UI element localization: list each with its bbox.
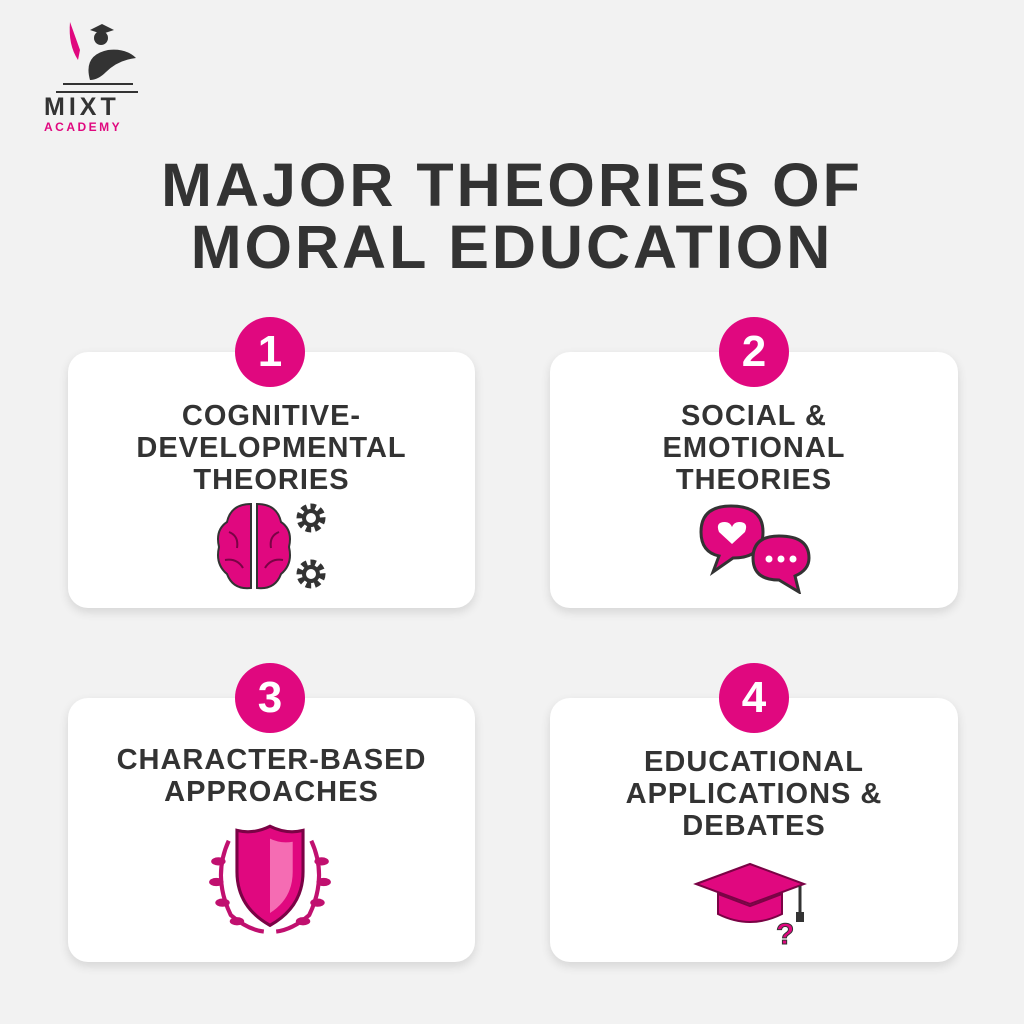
heading: card 1: THEORIES [193, 464, 350, 496]
heading: card 2 [662, 400, 846, 496]
heading: card 1: COGNITIVE- [182, 400, 361, 432]
heading: card 3: APPROACHES [164, 776, 379, 808]
badge 4 [719, 663, 789, 733]
heading: card 4: EDUCATIONAL [644, 746, 864, 778]
logo: ACADEMY [44, 120, 122, 134]
icon: graduation cap with question mark [693, 862, 807, 946]
title: MORAL EDUCATION [191, 213, 833, 281]
heading: card 2: EMOTIONAL [662, 432, 846, 464]
heading: card 3 [117, 744, 426, 808]
badge 3 [235, 663, 305, 733]
icon: chat bubbles [700, 504, 810, 594]
logo [44, 22, 138, 134]
panel: card 4 [550, 698, 958, 962]
icon: brain with gears [217, 503, 326, 590]
badge 1 [235, 317, 305, 387]
badge 2: 2 [742, 327, 766, 376]
heading: card 4: DEBATES [682, 810, 826, 842]
panel: card 3 [68, 698, 475, 962]
heading: card 1: DEVELOPMENTAL [136, 432, 407, 464]
badge 2 [719, 317, 789, 387]
heading: card 2: SOCIAL & [681, 400, 827, 432]
logo: MIXT [44, 93, 120, 121]
badge 1: 1 [258, 327, 282, 376]
icon: pink leaf [70, 22, 80, 60]
heading: card 3: CHARACTER-BASED [117, 744, 426, 776]
panel: card 1 [68, 352, 475, 608]
heading: card 1 [136, 400, 407, 496]
title: MAJOR THEORIES OF [161, 151, 863, 219]
icon: dark leaf [88, 50, 136, 80]
badge 3: 3 [258, 673, 282, 722]
heading: card 4: APPLICATIONS & [626, 778, 882, 810]
heading: card 2: THEORIES [676, 464, 832, 496]
badge 4: 4 [742, 673, 766, 722]
icon: shield with laurel [209, 824, 331, 934]
heading: card 4 [626, 746, 882, 842]
panel: card 2 [550, 352, 958, 608]
title [161, 151, 863, 281]
